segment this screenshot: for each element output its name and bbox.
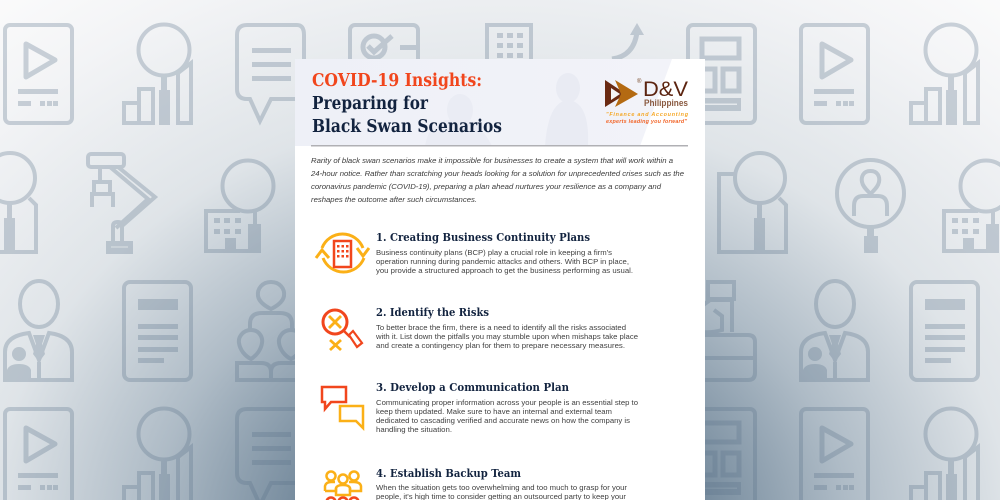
title: Black Swan Scenarios bbox=[312, 117, 502, 137]
text block: introduction: reshapes the outcome after such circumstances. bbox=[311, 195, 477, 204]
section 3 text: handling the situation. bbox=[376, 425, 452, 434]
section 1 text bbox=[376, 230, 633, 275]
section 4 text: When the situation gets too overwhelming and too much to grasp for your bbox=[376, 483, 628, 492]
text block: introduction bbox=[310, 156, 684, 204]
logo: D&V Philippines: "Finance and Accounting bbox=[606, 112, 689, 118]
section 4 text: 4. Establish Backup Team bbox=[376, 466, 521, 480]
section 2 text: with it. List down the pitfalls you may stumble upon when mishaps take place bbox=[375, 332, 638, 341]
section 1 text: 1. Creating Business Continuity Plans bbox=[376, 230, 590, 244]
logo: D&V Philippines bbox=[605, 78, 689, 125]
section 3 text: 3. Develop a Communication Plan bbox=[376, 380, 570, 394]
divider bbox=[311, 145, 688, 146]
logo: D&V Philippines: experts leading you forward" bbox=[606, 119, 687, 125]
section 3 text: keep them updated. Make sure to have an internal and external team bbox=[376, 407, 612, 416]
section 2 text: 2. Identify the Risks bbox=[376, 305, 489, 319]
icon: building with cycle arrows bbox=[316, 234, 369, 272]
section 4 text bbox=[376, 466, 628, 500]
section 3 text: dedicated to cascading verified and accurate news on how the company is bbox=[376, 416, 630, 425]
section 2 text: and create a contingency plan for them to prepare necessary measures. bbox=[376, 341, 625, 350]
title: Preparing for bbox=[312, 94, 429, 114]
section 2 text bbox=[375, 305, 638, 350]
title bbox=[312, 71, 502, 137]
text block: introduction: Rarity of black swan scenarios make it impossible for businesses to create a system that will work within a bbox=[311, 156, 673, 165]
section 1 text: Business continuity plans (BCP) play a crucial role in keeping a firm's bbox=[376, 248, 612, 257]
panel: header band bbox=[295, 59, 672, 146]
icon: speech bubbles bbox=[322, 387, 363, 428]
title: COVID-19 Insights: bbox=[312, 71, 482, 91]
icon: magnifier with risk marks bbox=[323, 310, 362, 350]
logo: D&V Philippines: ® bbox=[637, 78, 642, 85]
section 3 text: Communicating proper information across your people is an essential step to bbox=[376, 398, 638, 407]
section 3 text bbox=[376, 380, 638, 434]
icon: backup team bbox=[325, 472, 361, 500]
text block: introduction: 24-hour notice. Rather than scratching your heads looking for a solution for unprecedented crises such as the bbox=[310, 169, 684, 178]
logo: D&V Philippines: D&V bbox=[643, 78, 688, 101]
section 2 text: To better brace the firm, there is a need to identify all the risks associated bbox=[376, 323, 626, 332]
text block: introduction: coronavirus pandemic (COVID-19), preparing a plan ahead nurtures your resilience as a company and bbox=[311, 182, 662, 191]
logo: D&V Philippines: Philippines bbox=[644, 98, 688, 108]
section 1 text: you provide a structured approach to get the business performing as usual. bbox=[376, 266, 633, 275]
panel: document sheet bbox=[295, 59, 705, 500]
section 1 text: operation running during pandemic attacks and others. With BCP in place, bbox=[376, 257, 629, 266]
